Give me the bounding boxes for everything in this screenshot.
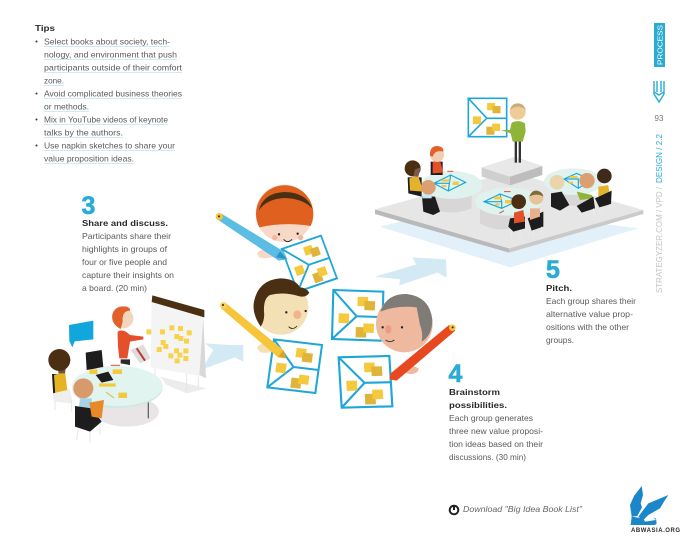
table — [72, 350, 163, 427]
canvas right upper — [332, 290, 383, 341]
floor shadow — [380, 207, 638, 267]
presenter — [501, 103, 526, 163]
sticky notes — [157, 325, 192, 363]
download link — [450, 505, 583, 514]
arrow: to pitch — [375, 257, 447, 285]
arrow: to brainstorm — [198, 343, 243, 375]
presentation canvas — [468, 98, 507, 137]
logo: griffin: ABWASIA.ORG — [631, 528, 680, 534]
speech bubble — [69, 321, 93, 347]
pedestal — [482, 157, 542, 185]
step 3 body — [82, 232, 174, 293]
step 3 body: four or five people and — [82, 258, 167, 267]
step 5 body: Each group shares their — [546, 297, 636, 306]
section label: DESIGN / 2.2 — [655, 133, 664, 183]
platform floor — [375, 172, 643, 253]
step 4 heading: Brainstorm — [449, 387, 500, 397]
tips panel — [35, 23, 183, 164]
step 5 body: ositions with the other — [546, 323, 629, 332]
tips list: Avoid complicated business theories — [44, 89, 182, 98]
number 5: 5 — [546, 256, 560, 284]
number 4: 4 — [448, 360, 462, 388]
step 5 heading: Pitch. — [546, 283, 572, 293]
step 5 text — [546, 256, 636, 345]
boy head — [254, 278, 309, 335]
tips list: talks by the authors. — [44, 128, 123, 137]
seated person left — [48, 349, 73, 412]
logo: griffin — [630, 486, 680, 534]
icon: pencil — [654, 81, 664, 102]
illustration: discussion scene — [48, 295, 243, 443]
canvas left — [267, 339, 322, 393]
process tab — [654, 23, 665, 67]
girl head — [256, 185, 313, 242]
tips list: value proposition ideas. — [44, 154, 134, 163]
page number: 93 — [655, 114, 664, 123]
tips list: zone. — [44, 76, 64, 85]
step 4 body: three new value proposi- — [449, 427, 543, 436]
tips list: Select books about society, tech- — [44, 37, 170, 46]
sidebar — [654, 23, 665, 293]
step 5 body: groups. — [546, 336, 574, 345]
step 5 body: alternative value prop- — [546, 310, 633, 319]
middle table group — [475, 188, 543, 238]
seated person front — [73, 378, 104, 443]
canvas top — [282, 236, 337, 292]
step 3 body: highlights in groups of — [82, 245, 168, 254]
left table group — [405, 146, 482, 222]
step 5 body — [546, 297, 636, 345]
standing person — [112, 306, 151, 365]
site label: STRATEGYZER.COM / VPD / — [655, 186, 664, 293]
tips list — [36, 37, 183, 163]
process tab: PROCESS — [655, 25, 664, 65]
step 4 heading — [449, 387, 507, 410]
tips list: participants outside of their comfort — [44, 63, 183, 72]
illustration: pitch scene — [375, 98, 643, 267]
tips list: Use napkin sketches to share your — [44, 141, 175, 150]
tips list: nology, and environment that push — [44, 50, 177, 59]
tips list: Mix in YouTube videos of keynote — [44, 115, 168, 124]
yellow pencil and hand — [220, 302, 287, 358]
flipchart — [151, 295, 207, 393]
tips list: or methods. — [44, 102, 89, 111]
right table group — [544, 168, 612, 217]
step 4 heading: possibilities. — [449, 400, 507, 410]
tips heading: Tips — [35, 23, 55, 33]
step 4 text — [448, 360, 543, 462]
step 3 heading: Share and discuss. — [82, 218, 168, 228]
step 3 body: a board. (20 min) — [82, 284, 147, 293]
step 4 body: Each group generates — [449, 414, 533, 423]
step 4 body — [449, 414, 543, 462]
blue pencil and hand — [216, 213, 287, 261]
step 3 body: Participants share their — [82, 232, 171, 241]
older man head — [376, 294, 433, 352]
step 3 text — [82, 192, 174, 293]
illustration: brainstorm group — [216, 185, 456, 408]
number 3: 3 — [82, 192, 95, 220]
step 3 body: capture their insights on — [82, 271, 174, 280]
step 4 body: discussions. (30 min) — [449, 453, 526, 462]
download text: Download "Big Idea Book List" — [463, 505, 583, 514]
canvas right lower — [339, 356, 392, 408]
red pencil and hand — [389, 324, 456, 381]
step 4 body: tion ideas based on their — [449, 440, 543, 449]
icon: download — [450, 505, 458, 514]
